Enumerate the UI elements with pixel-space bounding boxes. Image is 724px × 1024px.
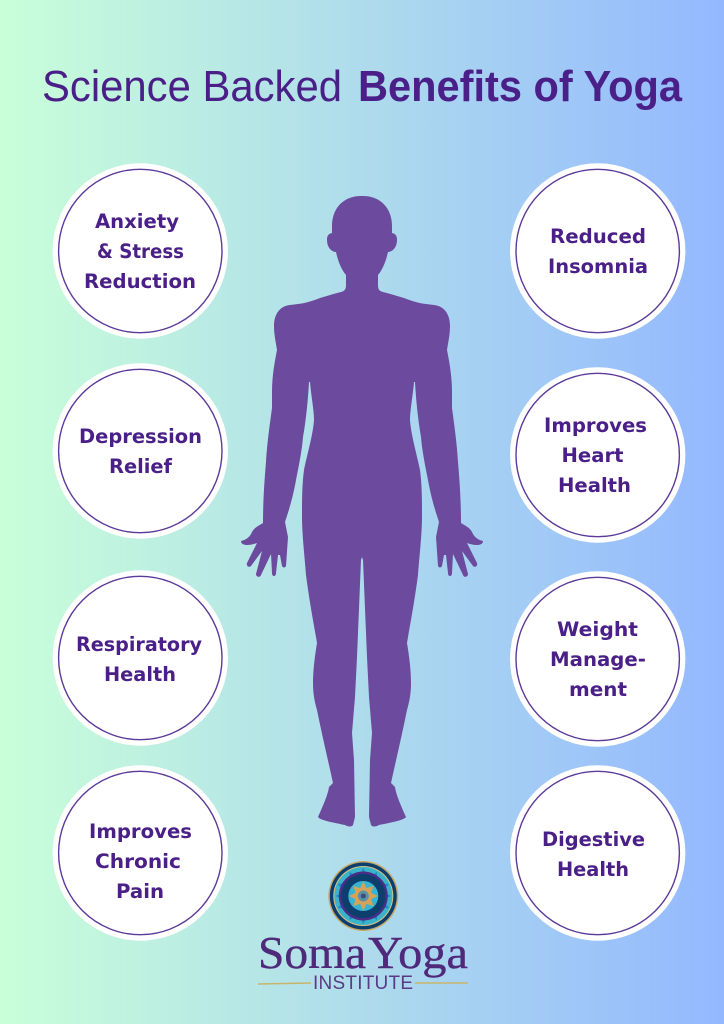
panel: digestive health	[510, 765, 685, 941]
logo: wordmark: INSTITUTE	[313, 973, 413, 994]
panel: depression relief: Depression	[79, 425, 202, 448]
panel: improves heart health: Heart	[562, 444, 624, 467]
panel: improves chronic pain: Chronic	[95, 850, 181, 873]
panel: respiratory health: Health	[104, 663, 176, 686]
panel: weight management	[510, 571, 685, 747]
panel: anxiety and stress reduction	[53, 163, 228, 339]
panel: digestive health: Health	[557, 858, 629, 881]
panel: reduced insomnia: Reduced	[550, 225, 646, 248]
panel: weight management: Manage-	[550, 648, 646, 671]
panel: depression relief	[53, 363, 228, 539]
title: Benefits of Yoga	[358, 62, 682, 111]
panel: improves chronic pain	[53, 765, 228, 941]
panel: improves heart health	[510, 367, 685, 543]
panel: improves heart health: Improves	[544, 414, 647, 437]
panel: digestive health: Digestive	[542, 828, 645, 851]
panel: improves heart health: Health	[558, 474, 631, 497]
title	[42, 62, 682, 111]
panel: reduced insomnia: Insomnia	[548, 255, 648, 278]
panel: anxiety and stress reduction: & Stress	[97, 240, 184, 263]
panel: anxiety and stress reduction: Reduction	[84, 270, 196, 293]
panel: respiratory health: Respiratory	[76, 633, 202, 656]
panel: improves chronic pain: Improves	[89, 820, 192, 843]
title: Science Backed	[42, 62, 342, 111]
panel: anxiety and stress reduction: Anxiety	[95, 210, 179, 233]
panel: weight management: ment	[569, 678, 627, 701]
panel: depression relief: Relief	[109, 455, 173, 478]
logo: mandala emblem	[328, 861, 398, 931]
panel: weight management: Weight	[557, 618, 638, 641]
panel: respiratory health	[53, 570, 228, 746]
logo: wordmark: Yoga	[368, 927, 468, 978]
logo: wordmark: Soma	[258, 927, 366, 978]
logo: wordmark	[258, 927, 468, 994]
panel: improves chronic pain: Pain	[116, 880, 164, 903]
human body silhouette	[241, 196, 483, 826]
panel: reduced insomnia	[510, 163, 685, 339]
